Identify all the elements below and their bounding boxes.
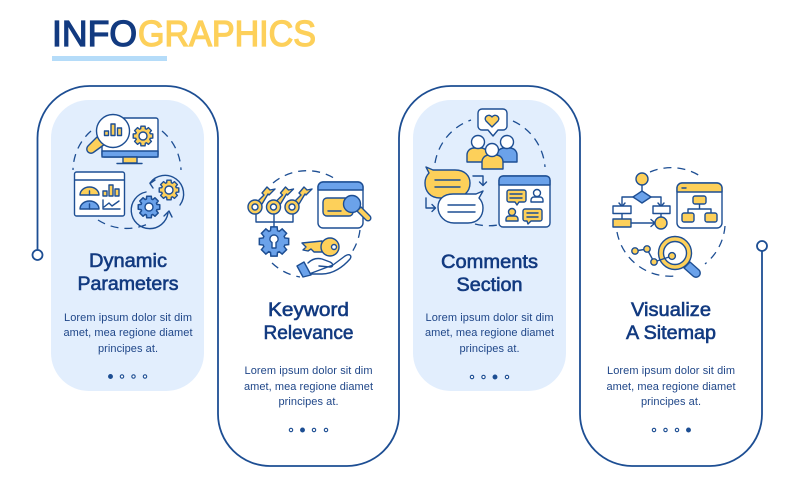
- text block: card 2: principes at.: [278, 396, 338, 408]
- text block: card 2: [244, 365, 373, 408]
- heading: Dynamic Parameters: [78, 250, 179, 295]
- heading: Visualize A Sitemap: A Sitemap: [626, 322, 716, 344]
- title underline: [52, 56, 167, 61]
- icon: dynamic parameters: [73, 114, 184, 229]
- text block: card 4: principes at.: [641, 396, 701, 408]
- text block: card 1: amet, mea regione diamet: [64, 327, 192, 339]
- title: GRAPHICS: [138, 13, 316, 54]
- heading: Visualize A Sitemap: [626, 299, 716, 344]
- text block: card 3: Lorem ipsum dolor sit dim: [426, 312, 554, 324]
- text block: card 4: [606, 365, 736, 408]
- end node: [757, 241, 767, 251]
- panel: card 3 background: [413, 100, 566, 391]
- heading: Comments Section: [441, 251, 538, 296]
- title: INFO: [52, 13, 137, 54]
- text block: card 1: [64, 312, 192, 355]
- heading: Visualize A Sitemap: Visualize: [631, 299, 711, 321]
- heading: Keyword Relevance: Keyword: [268, 299, 349, 321]
- text block: card 3: amet, mea regione diamet: [425, 327, 554, 339]
- connecting outline: [38, 86, 762, 466]
- text block: card 1: principes at.: [98, 343, 158, 355]
- text block: card 1: Lorem ipsum dolor sit dim: [64, 312, 192, 324]
- pagination: card 4: [652, 428, 690, 432]
- text block: card 3: principes at.: [460, 343, 520, 355]
- text block: card 4: Lorem ipsum dolor sit dim: [607, 365, 735, 377]
- text block: card 4: amet, mea regione diamet: [606, 381, 736, 393]
- text block: card 2: Lorem ipsum dolor sit dim: [244, 365, 372, 377]
- panel: card 1 background: [51, 100, 204, 391]
- icon: visualize a sitemap: [613, 168, 725, 277]
- heading: Keyword Relevance: Relevance: [264, 322, 354, 344]
- start node: [32, 250, 42, 260]
- heading: Keyword Relevance: [264, 299, 354, 344]
- heading: Comments Section: Comments: [441, 251, 538, 273]
- pagination: card 1: [109, 375, 147, 378]
- heading: Dynamic Parameters: Dynamic: [89, 250, 167, 272]
- heading: Dynamic Parameters: Parameters: [78, 273, 179, 295]
- pagination: card 2: [289, 428, 328, 432]
- icon: comments section: [425, 109, 550, 227]
- title: [52, 13, 316, 54]
- text block: card 3: [425, 312, 554, 355]
- icon: keyword relevance: [248, 171, 371, 277]
- heading: Comments Section: Section: [456, 274, 522, 296]
- pagination: card 3: [470, 375, 509, 379]
- text block: card 2: amet, mea regione diamet: [244, 381, 373, 393]
